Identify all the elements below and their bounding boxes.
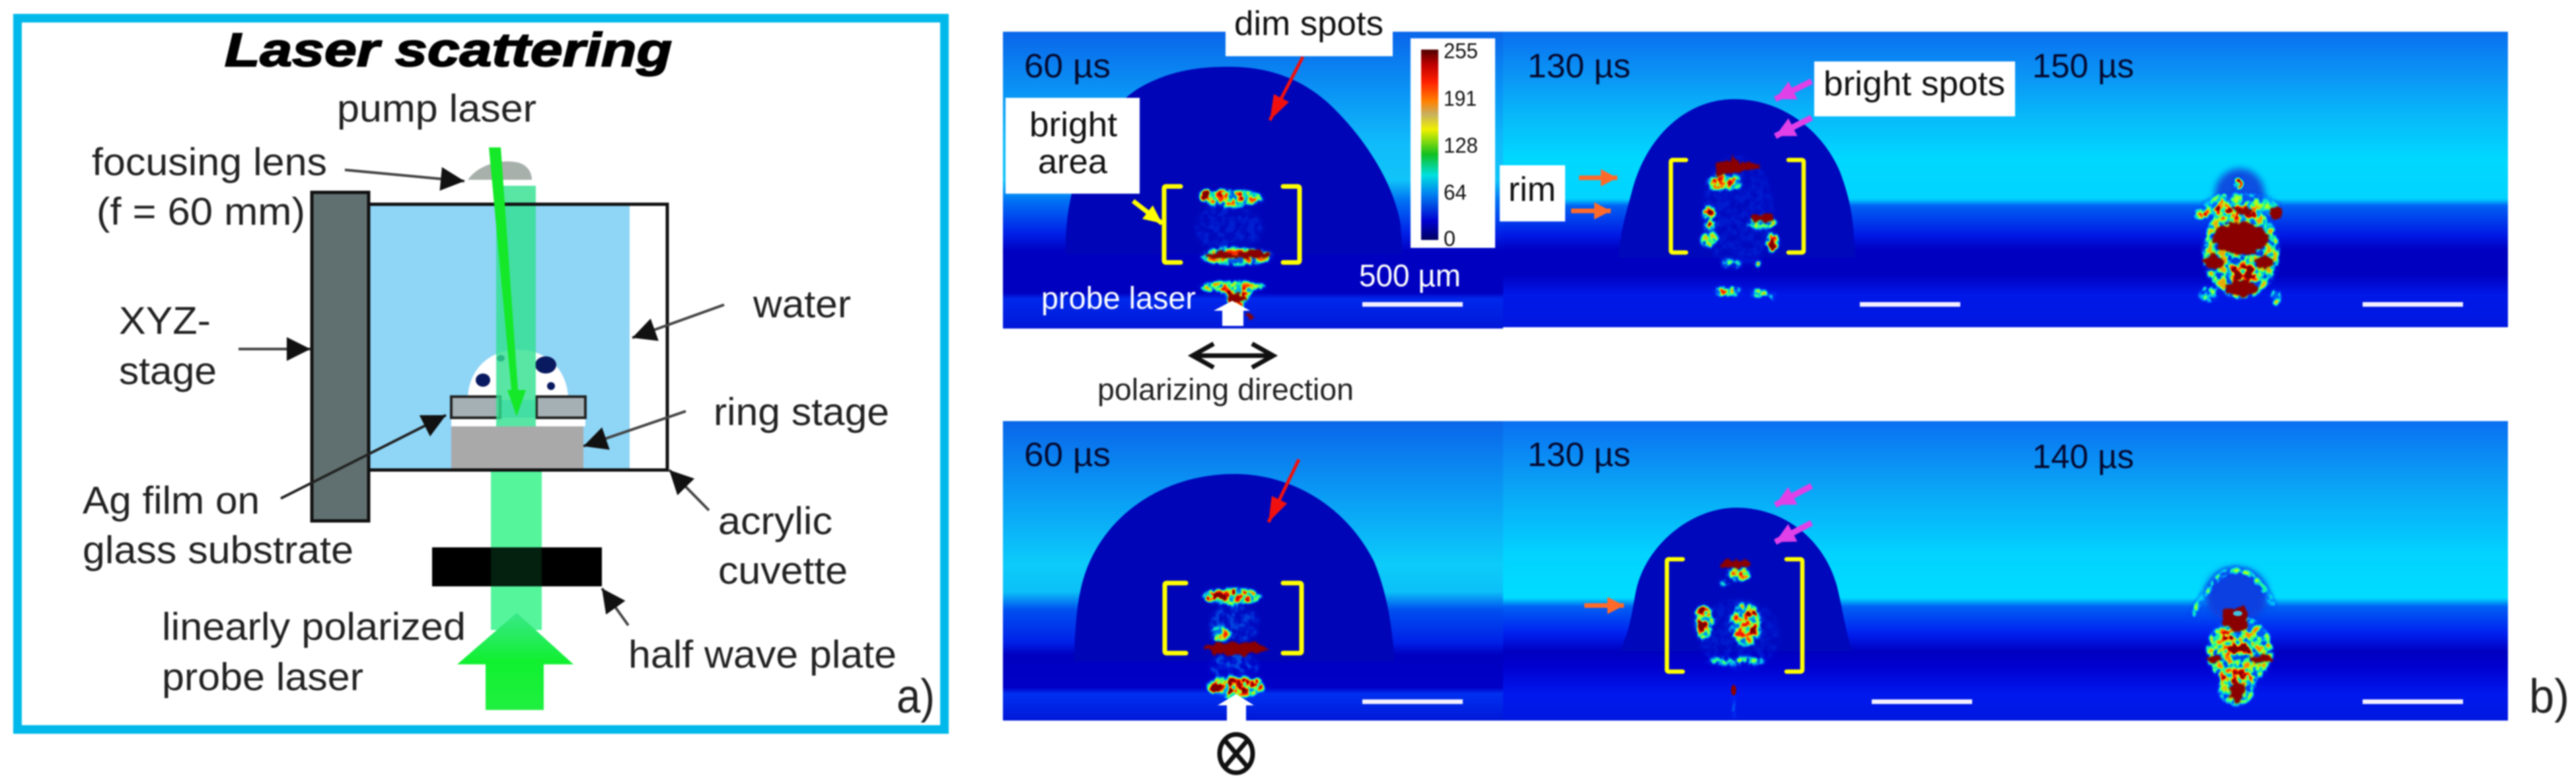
- label: acrylic: acrylic: [718, 500, 832, 543]
- droplet at 130 microseconds: [1620, 508, 1853, 651]
- probe beam, upper part: [496, 186, 536, 426]
- probe laser arrow: [457, 613, 573, 710]
- label box: bright area: bright: [1029, 106, 1118, 144]
- time label: 150 microseconds: 150 µs: [2032, 47, 2134, 85]
- arrow: Ag film: [281, 415, 446, 498]
- yellow bracket right, 60 microseconds: [1283, 583, 1302, 653]
- XYZ stage: [312, 192, 369, 521]
- hole in red core at 140 microseconds: [2233, 611, 2242, 616]
- label box: dim spots: dim spots: [1234, 5, 1383, 43]
- yellow bracket right, 130 microseconds: [1786, 559, 1802, 672]
- cuvette outline: [369, 204, 667, 470]
- droplet with dark bubbles: [468, 350, 568, 400]
- yellow bracket left, 130 microseconds: [1667, 559, 1683, 672]
- label: stage: stage: [119, 350, 217, 393]
- beam through half wave plate: [491, 547, 542, 586]
- probe beam, lower part: [491, 470, 542, 630]
- bright red patches at 130 microseconds: [1715, 153, 1773, 222]
- label: cuvette: cuvette: [718, 549, 848, 592]
- bright red bands at 60 microseconds: [1204, 250, 1269, 319]
- arrow: rim: [1584, 603, 1624, 608]
- arrow: bright area: [1133, 201, 1162, 223]
- arrow: probe laser direction: [1214, 301, 1250, 326]
- time label: 60 microseconds: 60 µs: [1024, 436, 1111, 473]
- arrow: focusing lens: [345, 170, 464, 181]
- arrow: ring stage: [583, 411, 686, 446]
- colour scale: 255: [1444, 39, 1478, 63]
- label: scale 500 micrometres: 500 µm: [1359, 258, 1461, 293]
- dense red core at 150 microseconds: [2204, 206, 2282, 296]
- double-headed arrow: [1193, 344, 1273, 368]
- scattering speckle at 130 microseconds: [1694, 567, 1780, 718]
- small dome at 140 microseconds: [2205, 567, 2268, 623]
- label: focusing lens: focusing lens: [92, 141, 327, 184]
- label: focal length: (f = 60 mm): [96, 190, 305, 233]
- time label: 130 microseconds: 130 µs: [1527, 47, 1631, 85]
- Ag film holder right: [536, 397, 585, 418]
- label: polarizing direction: polarizing direction: [1097, 372, 1354, 407]
- yellow bracket left, 130 microseconds: [1671, 160, 1686, 253]
- red core at 140 microseconds: [2206, 606, 2273, 702]
- image background 60 microseconds: [1003, 32, 1503, 329]
- arrow: probe laser direction: [1218, 694, 1254, 721]
- pump laser beam: [489, 147, 526, 416]
- label: ring stage: ring stage: [714, 391, 889, 434]
- scattering speckle at 60 microseconds: [1195, 189, 1272, 308]
- bright red band at 60 microseconds: [1204, 643, 1267, 654]
- bright red patches at 130 microseconds: [1721, 559, 1749, 695]
- panel a: laser scattering setup: [17, 19, 945, 730]
- panel frame: [17, 19, 945, 730]
- panel letter a: a): [897, 670, 935, 723]
- droplet at 60 microseconds: [1074, 474, 1394, 661]
- scale bars: [1362, 699, 2463, 704]
- ring stage block: [451, 426, 583, 469]
- polarization into the page symbol: [1220, 734, 1253, 773]
- title: Laser scattering: [225, 24, 672, 77]
- label box: bright spots: [1814, 61, 2015, 116]
- colour scale: 128: [1444, 134, 1478, 157]
- label: Ag film on: Ag film on: [83, 479, 260, 522]
- time label: 60 microseconds: 60 µs: [1024, 47, 1111, 85]
- label: pump laser: pump laser: [337, 87, 536, 130]
- droplet at 130 microseconds: [1619, 99, 1855, 258]
- scattering speckle at 60 microseconds: [1203, 588, 1265, 699]
- arrows: rim: [1571, 178, 1617, 211]
- glass substrate: [451, 418, 585, 426]
- colour scale: [1411, 38, 1495, 251]
- polarizing direction indicator: [1097, 344, 1354, 407]
- half wave plate: [432, 547, 602, 586]
- bright spots arrows: [1775, 81, 1812, 136]
- label box: dim spots: [1226, 5, 1393, 56]
- arrow: dim spots: [1269, 459, 1299, 522]
- small dark dome at 150 microseconds: [2215, 169, 2265, 221]
- colour scale: 0: [1444, 227, 1455, 251]
- time label: 140 microseconds: 140 µs: [2032, 438, 2134, 475]
- scattering speckle at 130 microseconds: [1701, 155, 1778, 299]
- scale bars: [1362, 302, 2463, 307]
- image background 130 and 140 microseconds: [1503, 421, 2508, 721]
- panel b bottom row: polarization perpendicular: [1003, 421, 2508, 721]
- colour scale: 191: [1444, 87, 1477, 110]
- scattering speckle at 150 microseconds: [2194, 178, 2281, 305]
- time label: 130 microseconds: 130 µs: [1527, 436, 1631, 473]
- arrow: water: [632, 305, 724, 338]
- yellow bracket left, 60 microseconds: [1164, 186, 1181, 262]
- focusing lens: [468, 161, 532, 180]
- label: water: water: [753, 283, 851, 326]
- label: probe laser: probe laser: [162, 656, 363, 699]
- panel letter b: b): [2529, 670, 2569, 723]
- arrow: XYZ stage: [239, 348, 311, 350]
- water in cuvette: [369, 204, 630, 470]
- label: XYZ: XYZ-: [119, 299, 211, 342]
- yellow bracket right, 130 microseconds: [1788, 160, 1804, 253]
- Ag film holder left: [451, 397, 500, 418]
- scattering speckle at 140 microseconds: [2191, 570, 2273, 706]
- arrows: bright spots: [1775, 486, 1812, 542]
- arrow: half wave plate: [602, 588, 628, 625]
- colour scale: 64: [1444, 180, 1467, 204]
- arrow: acrylic cuvette: [669, 470, 709, 510]
- yellow bracket right, 60 microseconds: [1283, 186, 1300, 262]
- arrow: dim spots: [1270, 57, 1303, 120]
- yellow bracket left, 60 microseconds: [1165, 583, 1186, 653]
- panel b top row: polarization parallel: [1003, 5, 2508, 329]
- droplet at 60 microseconds: [1066, 67, 1403, 255]
- label box: bright spots: bright spots: [1823, 65, 2005, 103]
- label: half wave plate: half wave plate: [628, 633, 897, 676]
- image background 130 and 150 microseconds: [1503, 32, 2508, 327]
- image background 60 microseconds: [1003, 421, 1503, 721]
- label: probe laser: probe laser: [1041, 280, 1196, 315]
- label box: rim: [1500, 165, 1565, 221]
- label box: rim: rim: [1508, 171, 1556, 209]
- label: glass substrate: glass substrate: [83, 529, 353, 572]
- label box: bright area: [1006, 98, 1140, 194]
- label: linearly polarized: linearly polarized: [162, 606, 466, 648]
- label box: bright area: area: [1038, 143, 1107, 181]
